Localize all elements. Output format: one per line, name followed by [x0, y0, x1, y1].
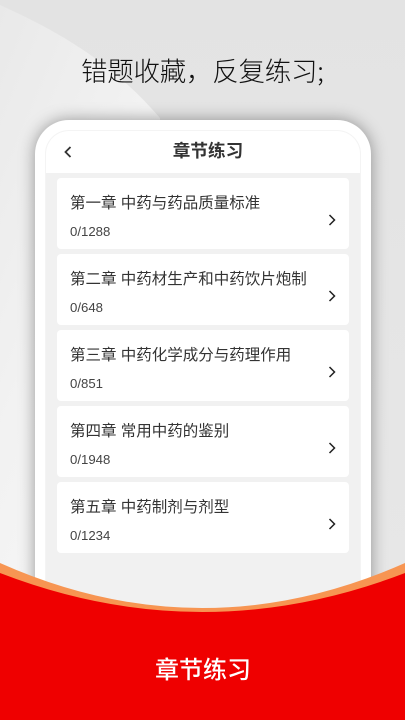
- chapter 5: 0/1234: [70, 528, 110, 543]
- phone mockup: [35, 120, 371, 640]
- screen heading: 章节练习: [173, 141, 243, 161]
- footer label: 章节练习: [155, 657, 251, 684]
- app screen: [45, 130, 361, 642]
- chapter 2: 第二章 中药材生产和中药饮片炮制: [70, 271, 307, 288]
- title: 错题收藏，反复练习;: [81, 50, 324, 89]
- icon: back arrow: [64, 146, 72, 158]
- chapter 3: [57, 330, 349, 401]
- chapter 2: 0/648: [70, 300, 103, 315]
- chapter 2: [57, 254, 349, 325]
- chapter 4: 0/1948: [70, 452, 110, 467]
- chapter 4: 第四章 常用中药的鉴别: [70, 423, 229, 440]
- chapter 1: 第一章 中药与药品质量标准: [70, 195, 260, 212]
- chapter 4: [57, 406, 349, 477]
- chapter 5: [57, 482, 349, 553]
- chapter 3: 第三章 中药化学成分与药理作用: [70, 347, 291, 364]
- chapter 3: 0/851: [70, 376, 103, 391]
- chapter 1: 0/1288: [70, 224, 110, 239]
- red footer curve: [0, 563, 405, 720]
- chapter 5: 第五章 中药制剂与剂型: [70, 499, 229, 516]
- app header: [46, 131, 362, 173]
- chapter 1: [57, 178, 349, 249]
